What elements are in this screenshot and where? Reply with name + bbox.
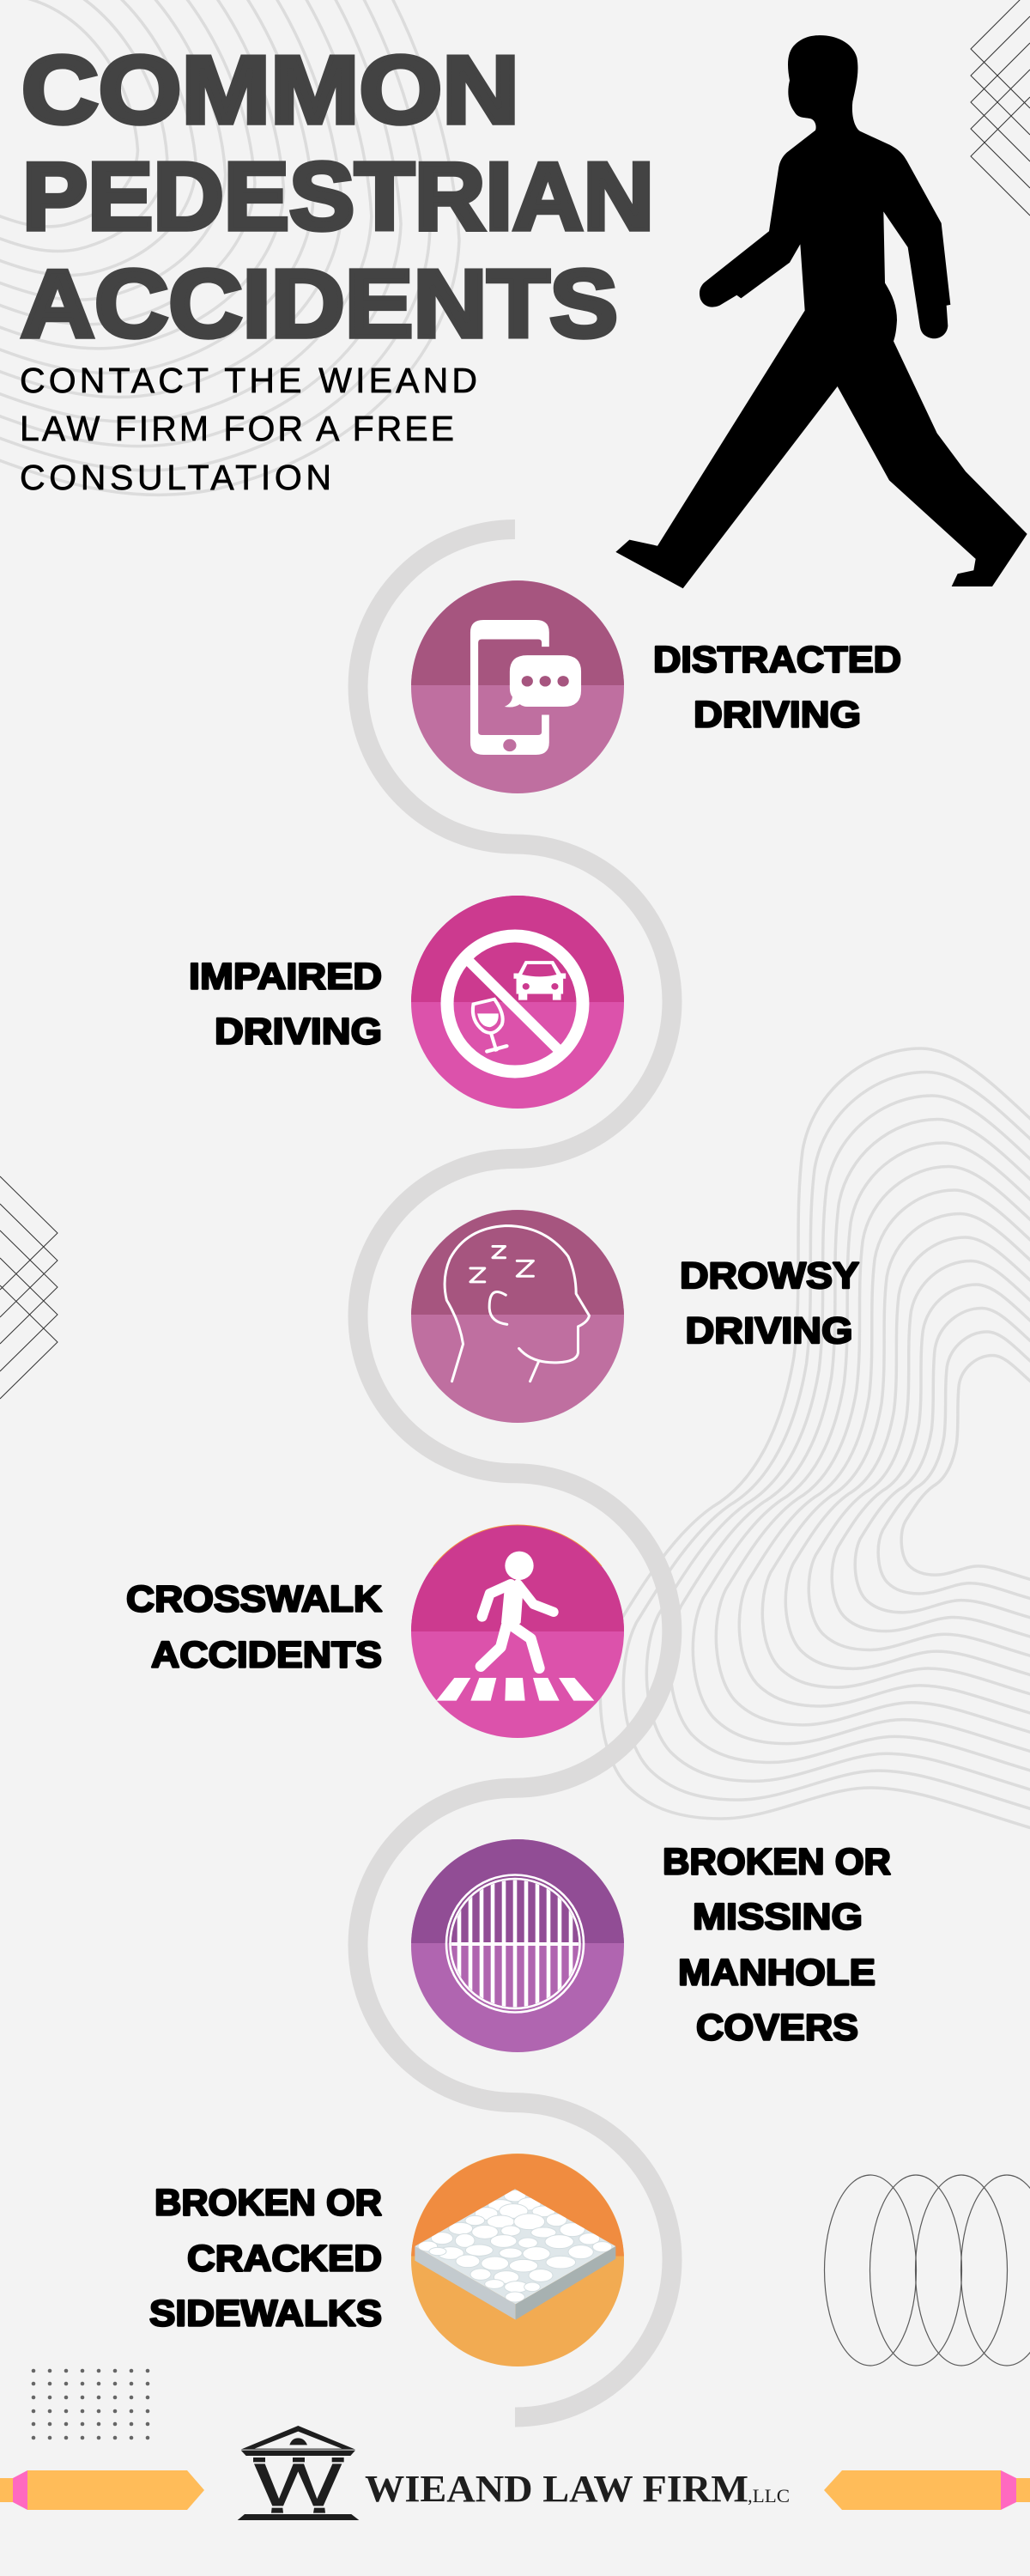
subtitle: CONTACT THE WIEAND xyxy=(20,361,477,400)
title: PEDESTRIAN xyxy=(22,143,654,250)
logo wordmark: ,LLC xyxy=(748,2485,790,2506)
logo: Wieand Law Firm xyxy=(238,2426,790,2520)
step 3: drowsy driving xyxy=(411,1210,859,1423)
circle 6 xyxy=(411,2154,624,2366)
label: crosswalk accidents: CROSSWALK xyxy=(126,1578,382,1619)
walking person silhouette xyxy=(615,35,1027,588)
label: distracted driving: DRIVING xyxy=(694,694,861,735)
decorative ovals: bottom right xyxy=(824,2175,1030,2366)
decorative contour lines: top left xyxy=(0,0,459,495)
label: crosswalk accidents xyxy=(126,1578,382,1676)
label: distracted driving: DISTRACTED xyxy=(653,639,901,680)
label: impaired driving: DRIVING xyxy=(215,1012,382,1053)
label: broken or cracked sidewalks xyxy=(149,2183,382,2334)
circle 5 xyxy=(411,1839,624,2052)
icon: temple W mark xyxy=(238,2426,359,2520)
label: crosswalk accidents: ACCIDENTS xyxy=(151,1635,382,1676)
circle 1 xyxy=(411,580,624,793)
label: broken or missing manhole covers: BROKEN OR xyxy=(663,1841,891,1882)
decorative chevrons: left xyxy=(0,1176,58,1399)
icon: pedestrian on crosswalk xyxy=(436,1552,594,1701)
label: drowsy driving: DROWSY xyxy=(680,1255,859,1297)
label: broken or missing manhole covers: MANHOLE xyxy=(678,1953,876,1994)
label: distracted driving xyxy=(653,639,901,735)
icon: no drinking and driving xyxy=(447,936,583,1072)
dot grid xyxy=(32,2369,149,2439)
title: COMMON xyxy=(21,37,519,143)
icon: manhole cover xyxy=(446,1875,584,2013)
label: impaired driving xyxy=(189,957,382,1053)
icon: cracked sidewalk slab xyxy=(415,2189,615,2320)
label: broken or cracked sidewalks: CRACKED xyxy=(187,2238,382,2279)
circle 3 xyxy=(411,1210,624,1423)
label: impaired driving: IMPAIRED xyxy=(189,957,382,998)
label: broken or cracked sidewalks: BROKEN OR xyxy=(154,2183,382,2224)
subtitle: CONSULTATION xyxy=(20,458,331,497)
title xyxy=(21,37,654,357)
step 1: distracted driving xyxy=(411,580,901,793)
left pencil decoration xyxy=(0,2470,204,2510)
right pencil decoration xyxy=(824,2470,1030,2510)
label: broken or missing manhole covers: MISSING xyxy=(693,1896,863,1937)
winding timeline path xyxy=(358,529,672,2417)
label: drowsy driving xyxy=(680,1255,859,1352)
label: broken or missing manhole covers xyxy=(663,1841,891,2049)
subtitle xyxy=(20,361,477,497)
title: ACCIDENTS xyxy=(21,251,618,357)
label: broken or missing manhole covers: COVERS xyxy=(696,2008,858,2049)
step 6: broken or cracked sidewalks xyxy=(149,2154,624,2366)
step 2: impaired driving xyxy=(189,896,624,1109)
decorative chevrons: top right xyxy=(971,0,1030,216)
logo wordmark: WIEAND LAW FIRM xyxy=(365,2468,748,2510)
subtitle: LAW FIRM FOR A FREE xyxy=(20,409,454,448)
label: broken or cracked sidewalks: SIDEWALKS xyxy=(149,2293,382,2334)
decorative contour lines: right side xyxy=(600,1048,1030,1847)
circle 2 xyxy=(411,896,624,1109)
icon: phone with chat bubble xyxy=(470,620,581,755)
step 5: broken or missing manhole covers xyxy=(411,1839,891,2052)
label: drowsy driving: DRIVING xyxy=(685,1310,853,1352)
icon: sleepy head xyxy=(445,1226,589,1382)
circle 4 xyxy=(411,1525,624,1738)
step 4: crosswalk accidents xyxy=(126,1525,624,1738)
